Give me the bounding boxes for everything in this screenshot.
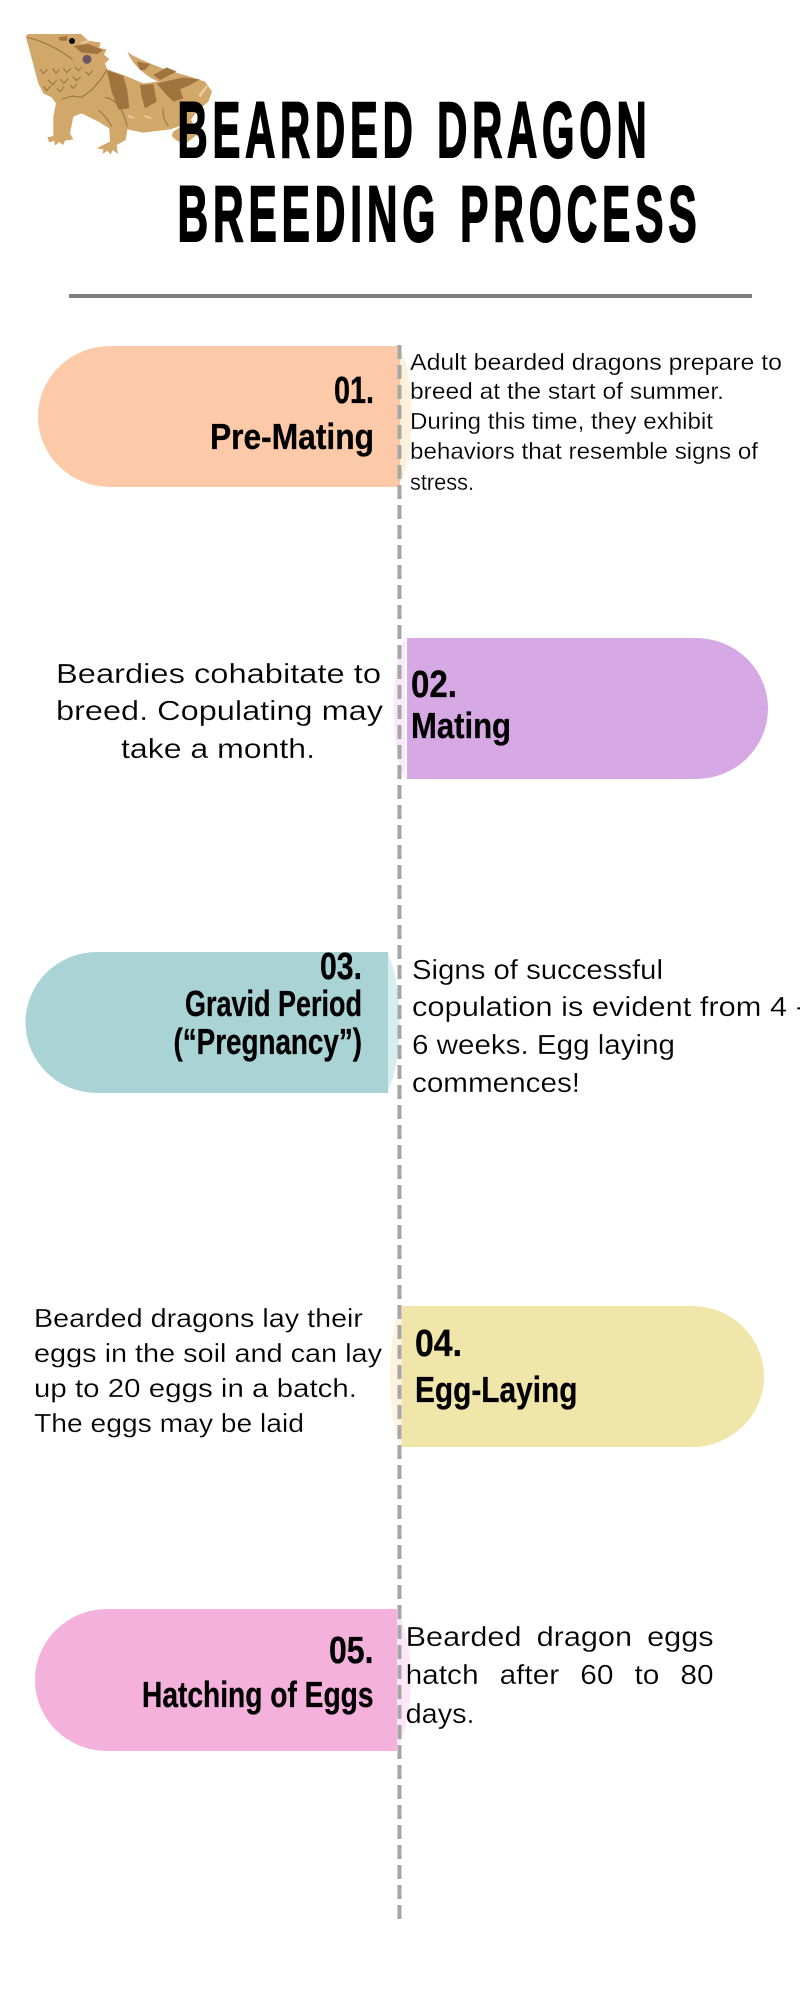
text block: step 2 description: Beardies cohabitate to [56,658,381,689]
icon: bearded dragon [26,34,212,155]
text block: step 2 description: take a month. [121,733,315,764]
panel: step 4 pill: Egg-Laying [415,1369,578,1410]
panel: step 5 pill: Hatching of Eggs [142,1674,374,1715]
icon: dragon ear [83,55,91,64]
panel: step 3 pill: Gravid Period [185,983,362,1024]
panel: step 1 pill: Pre-Mating [210,416,374,457]
panel: step 4 pill: 04. [415,1323,462,1365]
panel: step 3 pill [25,946,399,1093]
text block: step 1 description: Adult bearded dragons prepare to [410,349,782,375]
text block: step 3 description [412,954,800,1098]
text block: step 1 description: breed at the start of summer. [410,378,724,404]
text block: step 4 description: The eggs may be laid [34,1408,304,1438]
icon: dragon eye [69,38,75,44]
text block: step 2 description [56,658,383,764]
text block: step 4 description: up to 20 eggs in a batch. [34,1373,357,1403]
text block: step 4 description [34,1303,382,1438]
panel: step 1 pill: 01. [334,370,374,412]
text block: step 3 description: Signs of successful [412,954,663,985]
panel: step 5 pill [35,1609,411,1751]
panel: step 3 pill: 03. [320,946,362,988]
panel: step 5 pill: 05. [329,1630,374,1672]
text block: step 5 description: Bearded dragon eggs [406,1621,714,1652]
text block: step 1 description: During this time, they exhibit [410,408,714,434]
text block: step 1 description: stress. [410,469,474,495]
title divider rule [69,294,752,298]
panel: step 3 pill: (“Pregnancy”) [174,1021,362,1062]
panel: step 2 pill [394,638,768,779]
panel: step 2 pill: 02. [411,664,457,706]
panel: step 4 pill [390,1306,764,1447]
text block: step 3 description: commences! [412,1067,580,1098]
text block: step 4 description: Bearded dragons lay their [34,1303,363,1333]
text block: step 5 description: days. [406,1698,475,1729]
text block: step 1 description: behaviors that resemble signs of [410,438,759,464]
text block: step 2 description: breed. Copulating may [56,695,383,726]
text block: step 5 description: hatch after 60 to 80 [406,1659,714,1690]
text block: step 5 description [406,1621,714,1729]
title [178,86,702,258]
panel: step 2 pill: Mating [411,705,511,746]
text block: step 4 description: eggs in the soil and can lay [34,1338,382,1368]
panel: step 1 pill [38,346,412,487]
timeline dashed line [398,345,402,1919]
text block: step 3 description: copulation is evident from 4 - [412,991,800,1022]
text block: step 1 description [410,349,782,495]
text block: step 3 description: 6 weeks. Egg laying [412,1029,675,1060]
